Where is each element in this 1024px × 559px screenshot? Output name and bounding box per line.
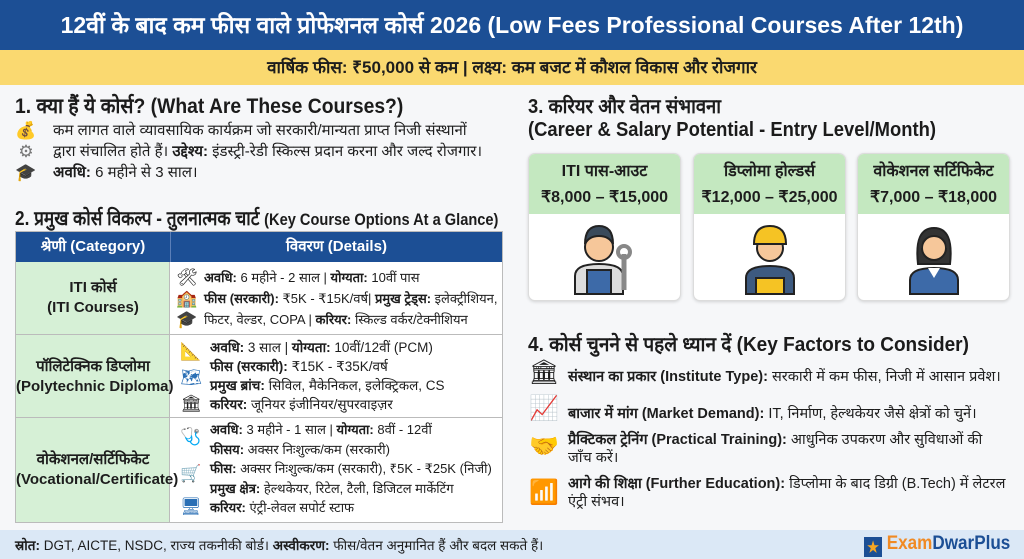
- row: vocational: (Vocational/Certificate): [16, 471, 178, 488]
- row: vocational: वोकेशनल/सर्टिफिकेट: [37, 451, 149, 468]
- row: polytechnic: पॉलिटेक्निक डिप्लोमा: [36, 358, 150, 375]
- icon: money bag: 💰: [15, 121, 37, 140]
- row: ITI: फिटर, वेल्डर, COPA | करियर: स्किल्ड वर्कर/टेक्नीशियन: [204, 312, 468, 327]
- icon: support agent: [909, 227, 959, 295]
- section 3 heading: 3. करियर और वेतन संभावना: [528, 96, 721, 118]
- row: polytechnic: (Polytechnic Diploma): [16, 378, 174, 395]
- factor: market demand: [529, 394, 977, 422]
- factor: practical training: [529, 430, 982, 466]
- row: ITI: 🏫: [176, 289, 198, 308]
- factor: institute type: [529, 359, 1001, 386]
- table header: श्रेणी (Category): [41, 238, 145, 255]
- logo: ★: [867, 539, 879, 555]
- icon: grad cap: 🎓: [15, 163, 37, 182]
- row: vocational: 🩺: [180, 427, 202, 446]
- row: polytechnic: करियर: जूनियर इंजीनियर/सुपरवाइज़र: [210, 397, 393, 412]
- icon: stairs: 📶: [529, 479, 559, 506]
- row: vocational: [16, 422, 492, 516]
- row: ITI: 🛠: [176, 268, 198, 287]
- icon: gear: ⚙: [18, 142, 34, 161]
- comparison table: [15, 231, 503, 523]
- row: polytechnic: [16, 335, 502, 418]
- header: title band: [0, 0, 1024, 50]
- factor: market demand: बाजार में मांग (Market Demand): IT, निर्माण, हेल्थकेयर जैसे क्षेत्रों को चुनें।: [568, 406, 977, 422]
- icon: mechanic: [574, 225, 632, 295]
- row: vocational: 🛒: [180, 464, 202, 483]
- row: polytechnic: 📐: [180, 342, 202, 361]
- row: ITI: फीस (सरकारी): ₹5K - ₹15K/वर्ष| प्रमुख ट्रेड्स: इलेक्ट्रीशियन,: [204, 291, 497, 306]
- factor: practical training: प्रैक्टिकल ट्रेनिंग (Practical Training): आधुनिक उपकरण और सुविधाओं की: [568, 432, 982, 448]
- card: diploma: डिप्लोमा होल्डर्स: [724, 163, 815, 180]
- row: vocational: करियर: एंट्री-लेवल सपोर्ट स्टाफ: [210, 500, 354, 515]
- card: vocational: [857, 153, 1010, 301]
- row: vocational: फीस: अक्सर निःशुल्क/कम (सरकारी), ₹5K - ₹25K (निजी): [210, 461, 492, 476]
- section 1 heading: 1. क्या हैं ये कोर्स? (What Are These Courses?): [15, 95, 403, 118]
- row: vocational: अवधि: 3 महीने - 1 साल | योग्यता: 8वीं - 12वीं: [210, 422, 432, 437]
- category column: [16, 262, 170, 522]
- row: polytechnic: अवधि: 3 साल | योग्यता: 10वीं/12वीं (PCM): [210, 340, 433, 355]
- subtitle band: वार्षिक फीस: ₹50,000 से कम | लक्ष्य: कम बजट में कौशल विकास और रोजगार: [267, 58, 757, 77]
- card: ITI: ITI पास-आउट: [562, 163, 647, 180]
- section 4 heading: 4. कोर्स चुनने से पहले ध्यान दें (Key Factors to Consider): [528, 334, 969, 356]
- row: ITI: 🎓: [176, 310, 198, 329]
- factor: practical training: जाँच करें।: [568, 450, 618, 466]
- card: ITI: [528, 153, 681, 301]
- row: ITI: अवधि: 6 महीने - 2 साल | योग्यता: 10वीं पास: [204, 270, 420, 285]
- row: ITI: ITI कोर्स: [69, 279, 117, 296]
- row: ITI: (ITI Courses): [47, 299, 139, 316]
- logo: ExamDwarPlus: [887, 533, 1010, 554]
- row: polytechnic: प्रमुख ब्रांच: सिविल, मैकेनिकल, इलेक्ट्रिकल, CS: [210, 378, 445, 393]
- icon: building: 🏛: [529, 359, 559, 386]
- section 1 text block: [15, 120, 482, 182]
- table header: [16, 232, 502, 262]
- header: title band: 12वीं के बाद कम फीस वाले प्रोफेशनल कोर्स 2026 (Low Fees Professional Courses After 12th): [61, 12, 963, 38]
- row: polytechnic: फीस (सरकारी): ₹15K - ₹35K/वर्ष: [210, 359, 388, 374]
- section 3 heading: (Career & Salary Potential - Entry Level/Month): [528, 119, 936, 141]
- row: vocational: 🖥: [180, 497, 202, 516]
- factor: further education: [529, 474, 1006, 510]
- row: vocational: फीसय: अक्सर निःशुल्क/कम (सरकारी): [210, 442, 390, 456]
- section 1 text block: अवधि: 6 महीने से 3 साल।: [53, 164, 198, 181]
- section 1 text block: कम लागत वाले व्यावसायिक कार्यक्रम जो सरकारी/मान्यता प्राप्त निजी संस्थानों: [53, 122, 467, 139]
- factor: further education: आगे की शिक्षा (Further Education): डिप्लोमा के बाद डिग्री (B.Tech) में लेटरल: [568, 476, 1005, 492]
- row: polytechnic: 🏛: [180, 394, 202, 413]
- section 1 text block: द्वारा संचालित होते हैं। उद्देश्य: इंडस्ट्री-रेडी स्किल्स प्रदान करना और जल्द रोजगार।: [53, 143, 482, 160]
- subtitle band: [0, 50, 1024, 85]
- row: polytechnic: 🗺: [180, 368, 202, 387]
- card: ITI: ₹8,000 – ₹15,000: [541, 189, 668, 206]
- card: vocational: वोकेशनल सर्टिफिकेट: [873, 163, 994, 180]
- card: diploma: ₹12,000 – ₹25,000: [701, 189, 838, 206]
- row: ITI: [16, 262, 502, 335]
- factor: further education: एंट्री संभव।: [568, 494, 625, 510]
- card: vocational: ₹7,000 – ₹18,000: [870, 189, 997, 206]
- section 3 heading: [528, 94, 936, 141]
- icon: engineer: [745, 225, 795, 295]
- footer: [0, 530, 1024, 559]
- table header: विवरण (Details): [286, 238, 387, 255]
- row: vocational: प्रमुख क्षेत्र: हेल्थकेयर, रिटेल, टैली, डिजिटल मार्केटिंग: [210, 480, 454, 496]
- card: diploma: [693, 153, 846, 301]
- factor: institute type: संस्थान का प्रकार (Institute Type): सरकारी में कम फीस, निजी में आसान प्रवेश।: [568, 369, 1001, 385]
- source note: स्रोत: DGT, AICTE, NSDC, राज्य तकनीकी बोर्ड। अस्वीकरण: फीस/वेतन अनुमानित हैं और बदल सकते हैं।: [15, 538, 543, 553]
- icon: hands: 🤝: [529, 433, 559, 460]
- icon: growth chart: 📈: [529, 395, 559, 422]
- section 2 heading: 2. प्रमुख कोर्स विकल्प - तुलनात्मक चार्ट (Key Course Options At a Glance): [15, 208, 498, 230]
